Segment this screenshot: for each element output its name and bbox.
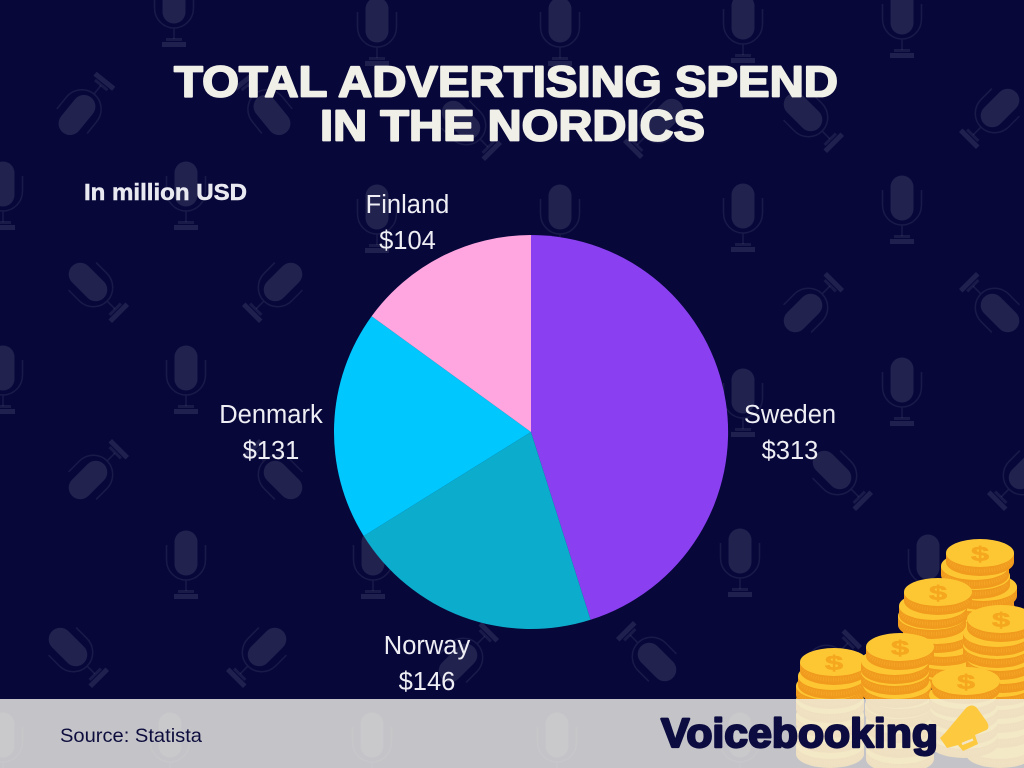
source: Source: Statista [60, 725, 202, 747]
logo: Voicebooking: Voicebooking [661, 710, 938, 756]
label: Denmark [219, 401, 323, 465]
slice: Norway [364, 432, 591, 629]
label: Norway [384, 632, 470, 696]
illustration: gold coin stacks: $ [957, 671, 975, 693]
illustration: gold coin stacks: $ [971, 543, 989, 565]
illustration: gold coin stacks [796, 539, 1024, 768]
label: Denmark: $131 [243, 437, 299, 465]
slice: Denmark [334, 316, 531, 536]
illustration: gold coin stacks: $ [992, 609, 1010, 631]
footer band [0, 699, 1024, 768]
label: Sweden [744, 401, 836, 465]
label: Norway: Norway [384, 632, 470, 660]
unit label: In million USD [84, 179, 247, 205]
pie chart [334, 235, 728, 629]
title: IN THE NORDICS [320, 102, 705, 150]
illustration: gold coin stacks: $ [825, 652, 843, 674]
slice: Finland [372, 235, 531, 432]
slice: Sweden [531, 235, 728, 620]
label: Sweden: Sweden [744, 401, 836, 429]
label: Finland: Finland [366, 191, 449, 219]
illustration: gold coin stacks: $ [891, 637, 909, 659]
title: TOTAL ADVERTISING SPEND [174, 58, 838, 106]
icon: megaphone [940, 706, 988, 751]
label: Finland: $104 [379, 227, 436, 255]
label: Norway: $146 [399, 668, 455, 696]
label: Denmark: Denmark [219, 401, 323, 429]
label: Sweden: $313 [762, 437, 818, 465]
label: Finland [366, 191, 449, 255]
title [174, 58, 838, 150]
illustration: gold coin stacks: $ [929, 582, 947, 604]
